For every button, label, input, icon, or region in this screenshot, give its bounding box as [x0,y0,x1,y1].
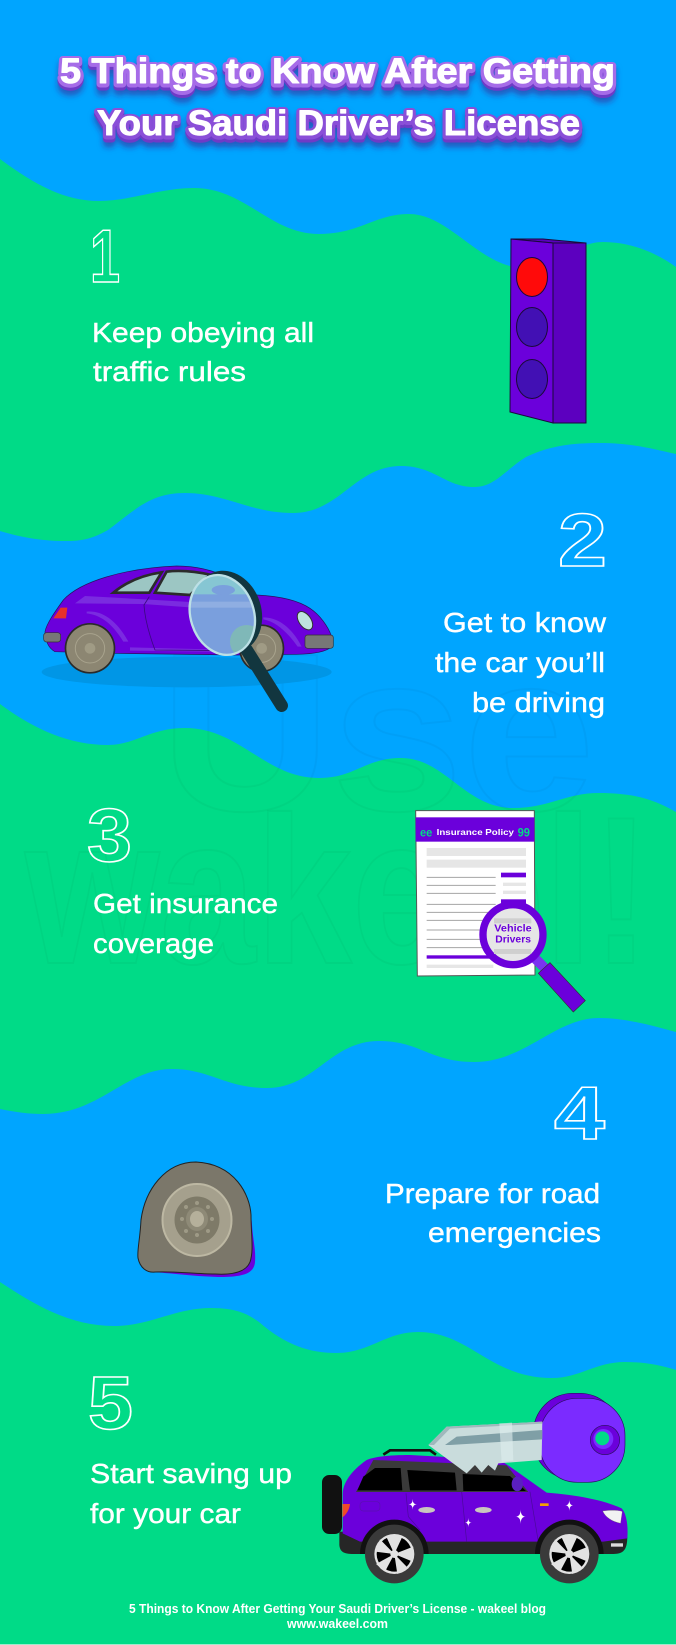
title line 2: Your Saudi Driver’s License [97,104,580,143]
door lines [406,1492,538,1542]
wheel arches [360,1520,604,1554]
rim ring [162,1184,232,1256]
key groove [445,1430,542,1445]
key head rim [533,1393,619,1479]
quote mark right: 99 [518,826,530,840]
red light [516,258,548,296]
title line 2: Your Saudi Driver’s License [97,108,580,147]
bumper light [611,1543,623,1547]
text: start saving up for your car: for your car [90,1498,241,1529]
number 3: 3 [87,793,132,877]
title line 1: 5 Things to Know After Getting [60,56,615,95]
roof rack [383,1450,436,1455]
indicator [540,1503,549,1506]
middle light [516,308,548,346]
tail light [53,608,67,618]
door line [144,597,237,651]
lug nuts [180,1201,214,1237]
footer credit: www.wakeel.com [286,1616,388,1631]
text: get insurance coverage: coverage [93,928,214,959]
icon: insurance policy document [416,811,585,1012]
key highlight [499,1423,513,1462]
headlight [603,1510,622,1523]
icon: spare tire [138,1162,255,1277]
quote mark left: ee [420,826,433,840]
key blade [428,1422,542,1473]
fuel door [360,1502,380,1511]
lens text: Vehicle [494,924,532,935]
magnifier rim [182,562,273,662]
hub [190,1211,204,1227]
key head face [540,1398,625,1482]
text: start saving up for your car [90,1458,292,1529]
title [60,52,615,147]
front bumper [305,635,333,648]
front wheel [540,1525,599,1583]
text: prepare for road emergencies [385,1178,601,1248]
rim centre [174,1196,220,1244]
windows [357,1468,526,1491]
text: keep obeying all traffic rules [92,317,314,387]
magnifier ring [483,905,543,965]
text: start saving up for your car: Start saving up [90,1458,292,1489]
body [343,1455,628,1542]
grey bars [427,848,526,968]
green wave band 1 [0,159,676,541]
number 4: 4 [554,1071,605,1155]
lens text: Drivers [495,935,531,946]
lens text [494,924,532,946]
purple back edge [152,1162,255,1277]
tire body [138,1162,252,1274]
text: get to know the car: the car you’ll [435,647,605,678]
title line 1: 5 Things to Know After Getting [60,52,615,91]
mirror [512,1477,523,1491]
watermark: Use wakeel!: Use [160,606,595,858]
text: get insurance coverage [93,888,278,959]
magnifier handle [538,963,585,1012]
number 2: 2 [558,498,607,582]
lower skirt [339,1532,627,1554]
magnifier lens [188,574,256,656]
purple bars [427,873,526,959]
window frame [356,1460,528,1492]
title line 2: Your Saudi Driver’s License [97,105,580,144]
watermark: Use wakeel! [24,606,650,1008]
spare wheel [322,1475,342,1534]
icon: traffic light [510,239,586,423]
footer credit: 5 Things to Know After Getting Your Saudi Driver’s License - wakeel blog [129,1601,546,1616]
lens dotted bars [494,918,531,923]
rear wheel [365,1525,424,1583]
green wave band 2 [0,704,676,1114]
header text: Insurance Policy [437,827,514,837]
bottom edge strip [0,1644,676,1645]
magnifier handle [247,650,282,706]
number 5: 5 [88,1361,133,1445]
text: keep obeying all traffic rules: Keep obeying all [92,317,314,348]
form lines [427,877,496,948]
text: prepare for road emergencies: Prepare for road [385,1178,600,1209]
rear bumper [44,633,61,642]
header band [416,817,534,842]
text: get to know the car: be driving [472,687,605,718]
green wave band 3 [0,1282,676,1645]
car shadow [42,657,332,687]
car body [45,566,332,655]
text: get to know the car: Get to know [443,607,607,638]
rear wheel [65,623,115,674]
text: get insurance coverage: Get insurance [93,888,278,919]
sparkles [409,1499,573,1527]
text: prepare for road emergencies: emergencies [428,1217,601,1248]
windows [113,572,162,593]
door handles [418,1507,435,1513]
tail light [342,1504,350,1517]
title line 1: 5 Things to Know After Getting [60,53,615,92]
headlight [294,609,316,633]
body highlight [75,596,190,607]
text: get to know the car [435,607,607,718]
text: keep obeying all traffic rules: traffic rules [93,356,246,387]
number 1: 1 [90,214,120,298]
front wheel [239,624,284,672]
icon: car with magnifier [42,562,333,706]
magnifier neck [535,958,546,969]
key hole [590,1425,620,1455]
bottom light [516,360,548,398]
icon: SUV with key [322,1393,628,1583]
footer credit [129,1601,546,1631]
paper [416,811,535,976]
